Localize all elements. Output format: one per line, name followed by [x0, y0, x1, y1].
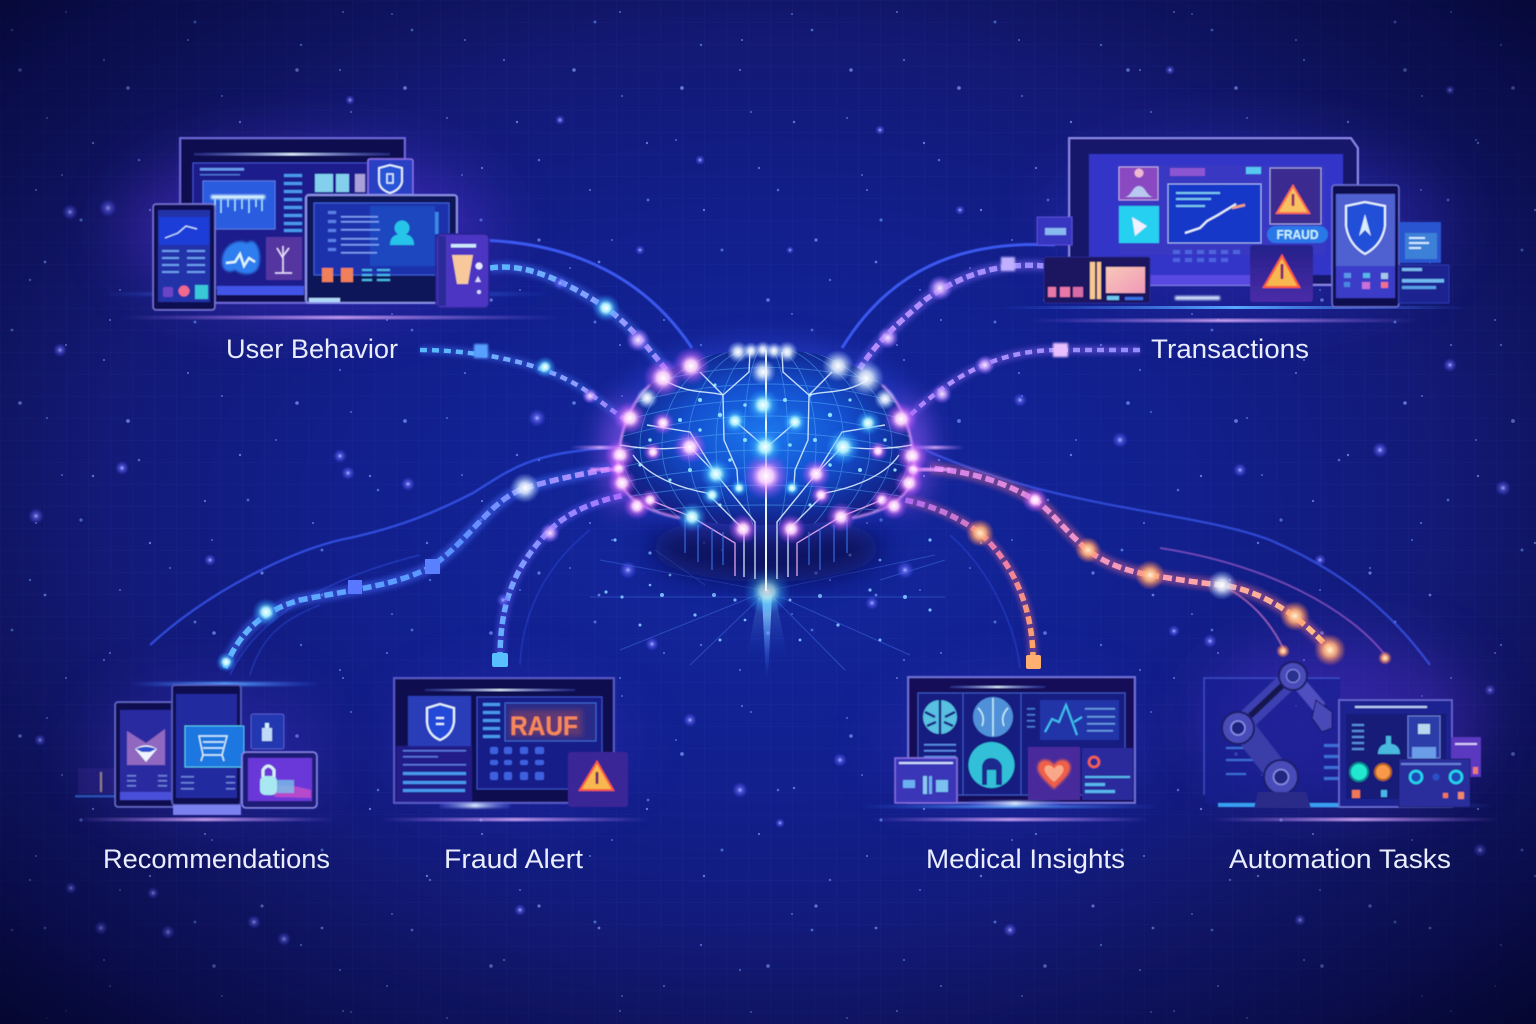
phone with shield: [1332, 185, 1399, 307]
base glow: [970, 801, 1060, 806]
shield tile: [368, 159, 413, 197]
device cluster: Transactions: [1037, 138, 1449, 307]
bottom spike of light: [743, 567, 791, 680]
small right panels: [1399, 222, 1449, 303]
monitor: [908, 677, 1135, 803]
label: Recommendations: Recommendations: [103, 844, 330, 874]
brain scan icon: [923, 700, 957, 734]
brain halo: [608, 342, 924, 538]
brain wireframe dome: [620, 350, 912, 525]
FRAUD pill: FRAUD: [1276, 227, 1318, 242]
lungs circle: [968, 742, 1014, 788]
faint background connection arcs: [150, 448, 1430, 675]
brain MRI icon: [973, 697, 1013, 737]
warning tile: [1250, 245, 1313, 302]
connection: brain to Medical Insights: [905, 500, 1041, 669]
back panel: [1204, 678, 1340, 807]
laptop: [306, 195, 457, 303]
connection: brain to Recommendations: [216, 468, 618, 672]
device cluster: Automation Tasks: [1204, 662, 1481, 808]
label: Medical Insights: Medical Insights: [926, 844, 1125, 874]
robot arm: [1222, 662, 1332, 808]
shadow below brain: [651, 514, 881, 582]
connection: Transactions to brain: [842, 244, 1055, 372]
device cluster: Recommendations: [75, 685, 317, 815]
device cluster: Medical Insights: [895, 677, 1135, 806]
label: Transactions: Transactions: [1151, 334, 1309, 364]
brain lower blue traces: [685, 520, 847, 570]
icon grid: [490, 747, 544, 780]
vitals tile: [1082, 748, 1133, 800]
FRAUD pill: [1267, 226, 1328, 243]
label: Automation Tasks: Automation Tasks: [1229, 844, 1451, 874]
base glow: [440, 803, 510, 808]
device cluster: User Behavior: [153, 138, 489, 310]
side flares: [570, 446, 965, 471]
center phone with cart: [172, 685, 244, 815]
warning tile: [568, 752, 628, 807]
RAUF display: [505, 703, 596, 741]
connection: second User Behavior link: [420, 344, 628, 422]
label: User Behavior: User Behavior: [226, 334, 398, 364]
brain glowing nodes: [604, 341, 928, 544]
tablet with lock: [242, 752, 317, 808]
side pink glows: [602, 400, 930, 510]
large monitor: [1069, 138, 1358, 300]
connection: User Behavior to brain: [470, 240, 692, 372]
main screen: [1339, 700, 1452, 807]
monitor: [180, 138, 405, 303]
purple phone: [436, 234, 489, 308]
control panel: [1399, 759, 1470, 807]
lower circuit network under the brain: [590, 538, 945, 670]
dark panel with bars: [1044, 257, 1150, 303]
brain circuit traces: right: [767, 352, 912, 579]
chart panel: [1027, 700, 1119, 740]
faint side tile: [75, 768, 115, 798]
brain outline glow: [618, 385, 914, 518]
small left tile: [895, 758, 957, 803]
connection: second Transactions link: [900, 343, 1140, 425]
floor glows and device halos: [75, 140, 1500, 821]
RAUF display: RAUF: [510, 711, 578, 741]
brain: [570, 341, 965, 591]
tablet: [153, 204, 215, 310]
monitor: [394, 678, 614, 803]
connection: brain to Automation Tasks: [930, 468, 1392, 666]
brain circuit traces: left: [620, 352, 765, 579]
left phone: [115, 702, 175, 807]
label: Fraud Alert: Fraud Alert: [444, 844, 584, 874]
device cluster: Fraud Alert: [394, 678, 628, 808]
purple small tile: [1451, 737, 1481, 777]
text panel: [396, 746, 472, 802]
brain central spine: [765, 350, 767, 591]
connection: brain to Fraud Alert: [492, 495, 625, 667]
heart tile: [1028, 747, 1080, 800]
small tile: [251, 714, 284, 749]
small left panel: [1037, 217, 1072, 245]
